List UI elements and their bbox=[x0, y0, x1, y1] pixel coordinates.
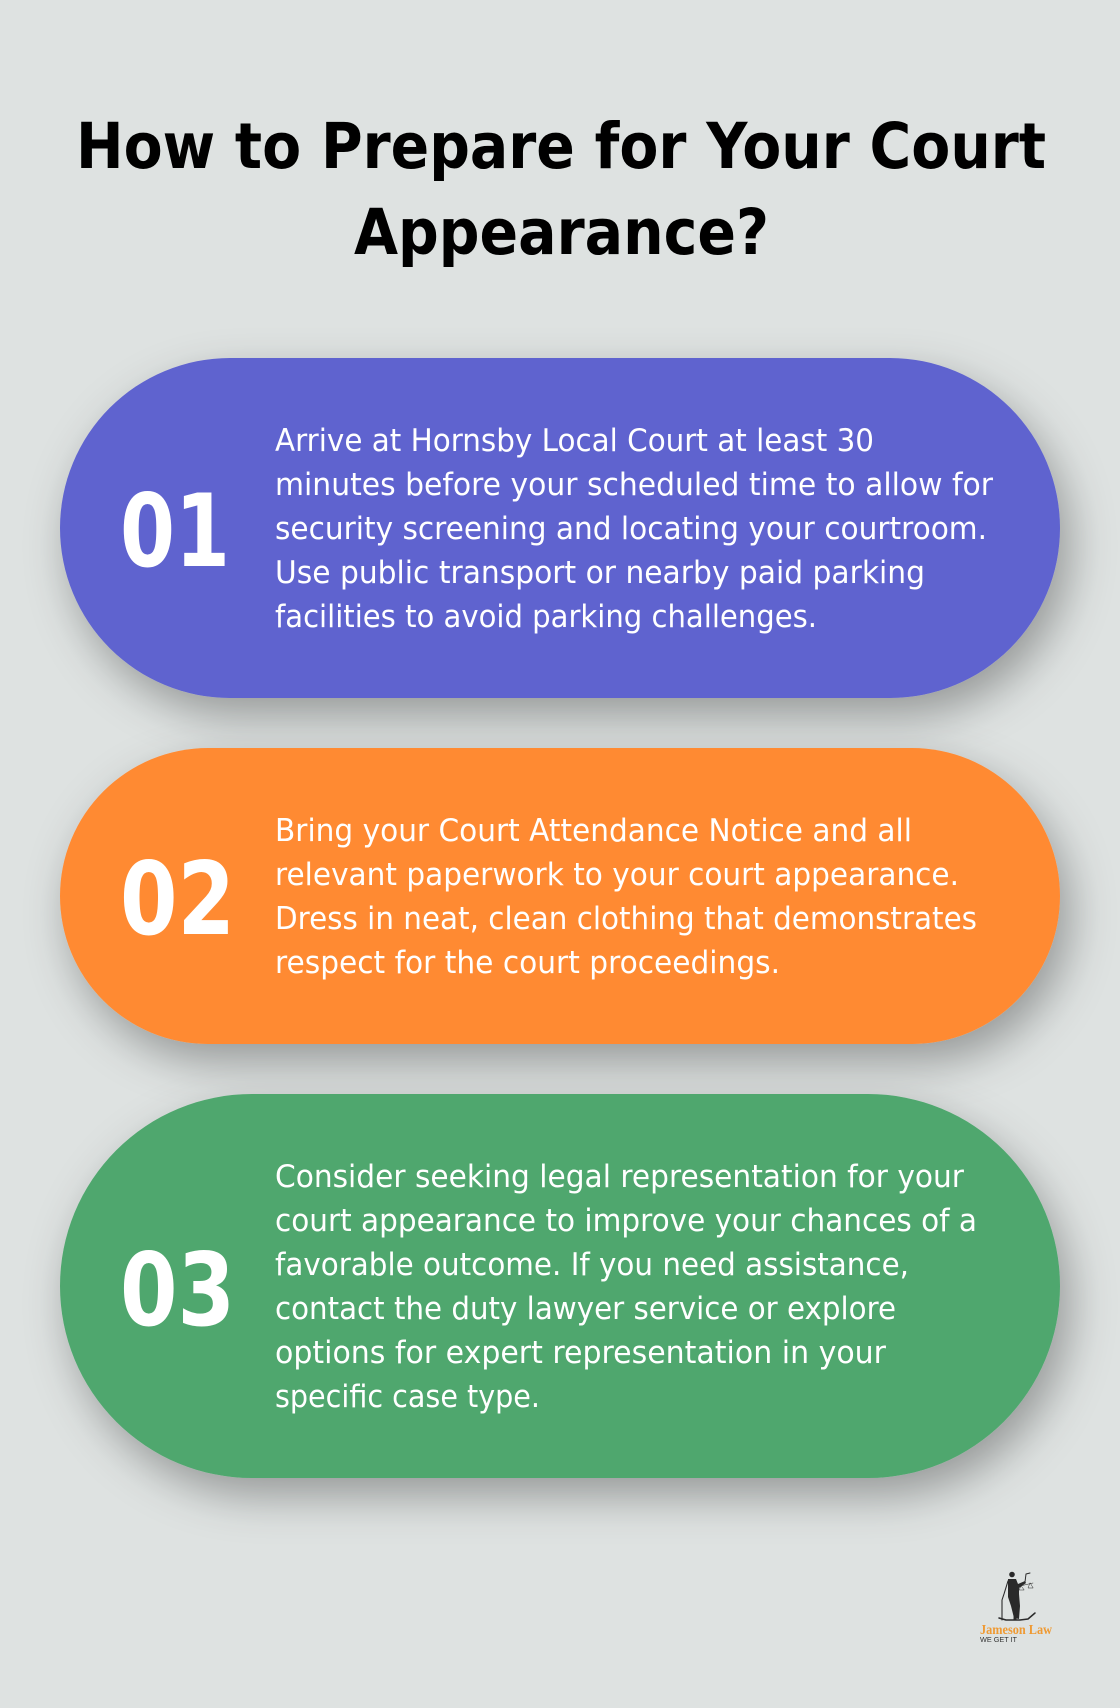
step 03 text: specific case type. bbox=[275, 1379, 540, 1415]
step 02 number: 02 bbox=[120, 840, 235, 958]
step 02 text: Bring your Court Attendance Notice and all bbox=[275, 813, 912, 849]
step 02 text: relevant paperwork to your court appearance. bbox=[275, 857, 959, 893]
panel: step 03 bbox=[60, 1094, 1060, 1478]
step 03 text: Consider seeking legal representation for your bbox=[275, 1159, 964, 1195]
step 02 pill background bbox=[60, 748, 1060, 1044]
title bbox=[76, 110, 1046, 269]
step 03 number: 03 bbox=[120, 1231, 235, 1349]
step 03 text: options for expert representation in your bbox=[275, 1335, 886, 1371]
step 03 pill background bbox=[60, 1094, 1060, 1478]
step 03 text bbox=[275, 1159, 977, 1415]
logo name: Jameson Law bbox=[980, 1622, 1052, 1637]
step 03 text: contact the duty lawyer service or explore bbox=[275, 1291, 896, 1327]
title: Appearance? bbox=[354, 196, 769, 269]
step 02 text: Dress in neat, clean clothing that demonstrates bbox=[275, 901, 977, 937]
logo tagline: WE GET IT bbox=[980, 1635, 1017, 1644]
step 02 text bbox=[275, 813, 977, 981]
title: How to Prepare for Your Court bbox=[76, 110, 1046, 183]
step 01 text: Arrive at Hornsby Local Court at least 30 bbox=[275, 423, 874, 459]
step 01 text: Use public transport or nearby paid parking bbox=[275, 555, 925, 591]
step 01 text: security screening and locating your courtroom. bbox=[275, 511, 987, 547]
panel: step 01 bbox=[60, 358, 1060, 698]
icon: lady justice with scales bbox=[999, 1572, 1035, 1620]
step 01 pill background bbox=[60, 358, 1060, 698]
panel: step 02 bbox=[60, 748, 1060, 1044]
step 03 text: favorable outcome. If you need assistance, bbox=[275, 1247, 909, 1283]
step 03 text: court appearance to improve your chances of a bbox=[275, 1203, 977, 1239]
step 01 text bbox=[275, 423, 993, 635]
step 02 text: respect for the court proceedings. bbox=[275, 945, 780, 981]
step 01 number: 01 bbox=[120, 472, 230, 590]
step 01 text: minutes before your scheduled time to allow for bbox=[275, 467, 993, 503]
step 01 text: facilities to avoid parking challenges. bbox=[275, 599, 817, 635]
logo: Jameson Law bbox=[980, 1572, 1052, 1644]
